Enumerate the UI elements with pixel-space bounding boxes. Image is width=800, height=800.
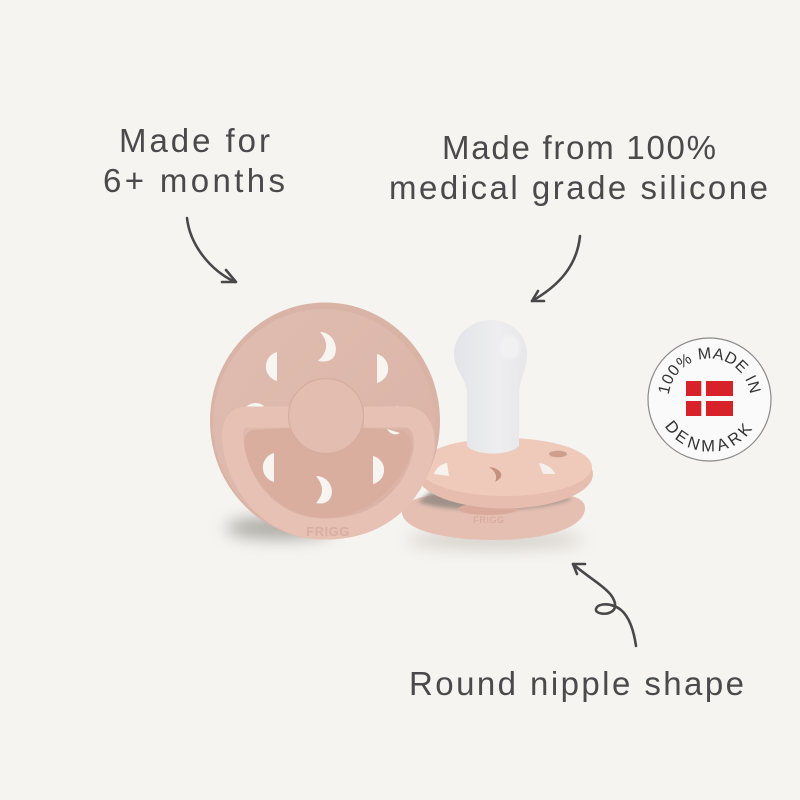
moon holes	[240, 332, 407, 504]
ground shadow: back pacifier	[407, 531, 583, 549]
badge circle	[648, 338, 771, 461]
Danish flag	[686, 381, 733, 416]
heading: made from silicone	[389, 129, 768, 206]
ground shadow: front pacifier	[226, 517, 334, 539]
arrow: to nipple	[532, 236, 580, 301]
inner shaded area of ring	[244, 428, 412, 518]
front pacifier	[210, 302, 440, 540]
shield rim	[210, 302, 440, 540]
nipple highlight	[500, 335, 520, 359]
shield edge	[417, 440, 593, 508]
badge top text: 100% MADE IN	[658, 347, 761, 394]
gap shadow	[418, 492, 572, 510]
shield top	[418, 438, 592, 496]
heading: made from silicone: medical grade silicone	[389, 169, 768, 206]
heading: made for 6+ months	[103, 122, 285, 199]
arrow: to front of pacifier	[187, 218, 236, 282]
shield face	[213, 309, 435, 537]
heading: made for 6+ months: Made for	[119, 122, 270, 159]
heading: made for 6+ months: 6+ months	[103, 162, 285, 199]
heading: round nipple shape: Round nipple shape	[409, 665, 744, 702]
center knob	[288, 378, 364, 454]
stem below shield	[458, 503, 518, 515]
ring handle	[233, 417, 424, 529]
back ring	[402, 492, 585, 540]
arrow: from nipple label	[573, 564, 636, 646]
badge: 100% made in Denmark	[647, 337, 772, 462]
brand on back ring: FRIGG	[474, 515, 504, 525]
badge bottom text: DENMARK	[665, 420, 752, 452]
nipple	[454, 320, 527, 454]
brand on ring: FRIGG	[306, 524, 350, 539]
heading: made from silicone: Made from 100%	[442, 129, 716, 166]
shield holes	[434, 451, 567, 482]
back pacifier, side view	[402, 320, 593, 549]
